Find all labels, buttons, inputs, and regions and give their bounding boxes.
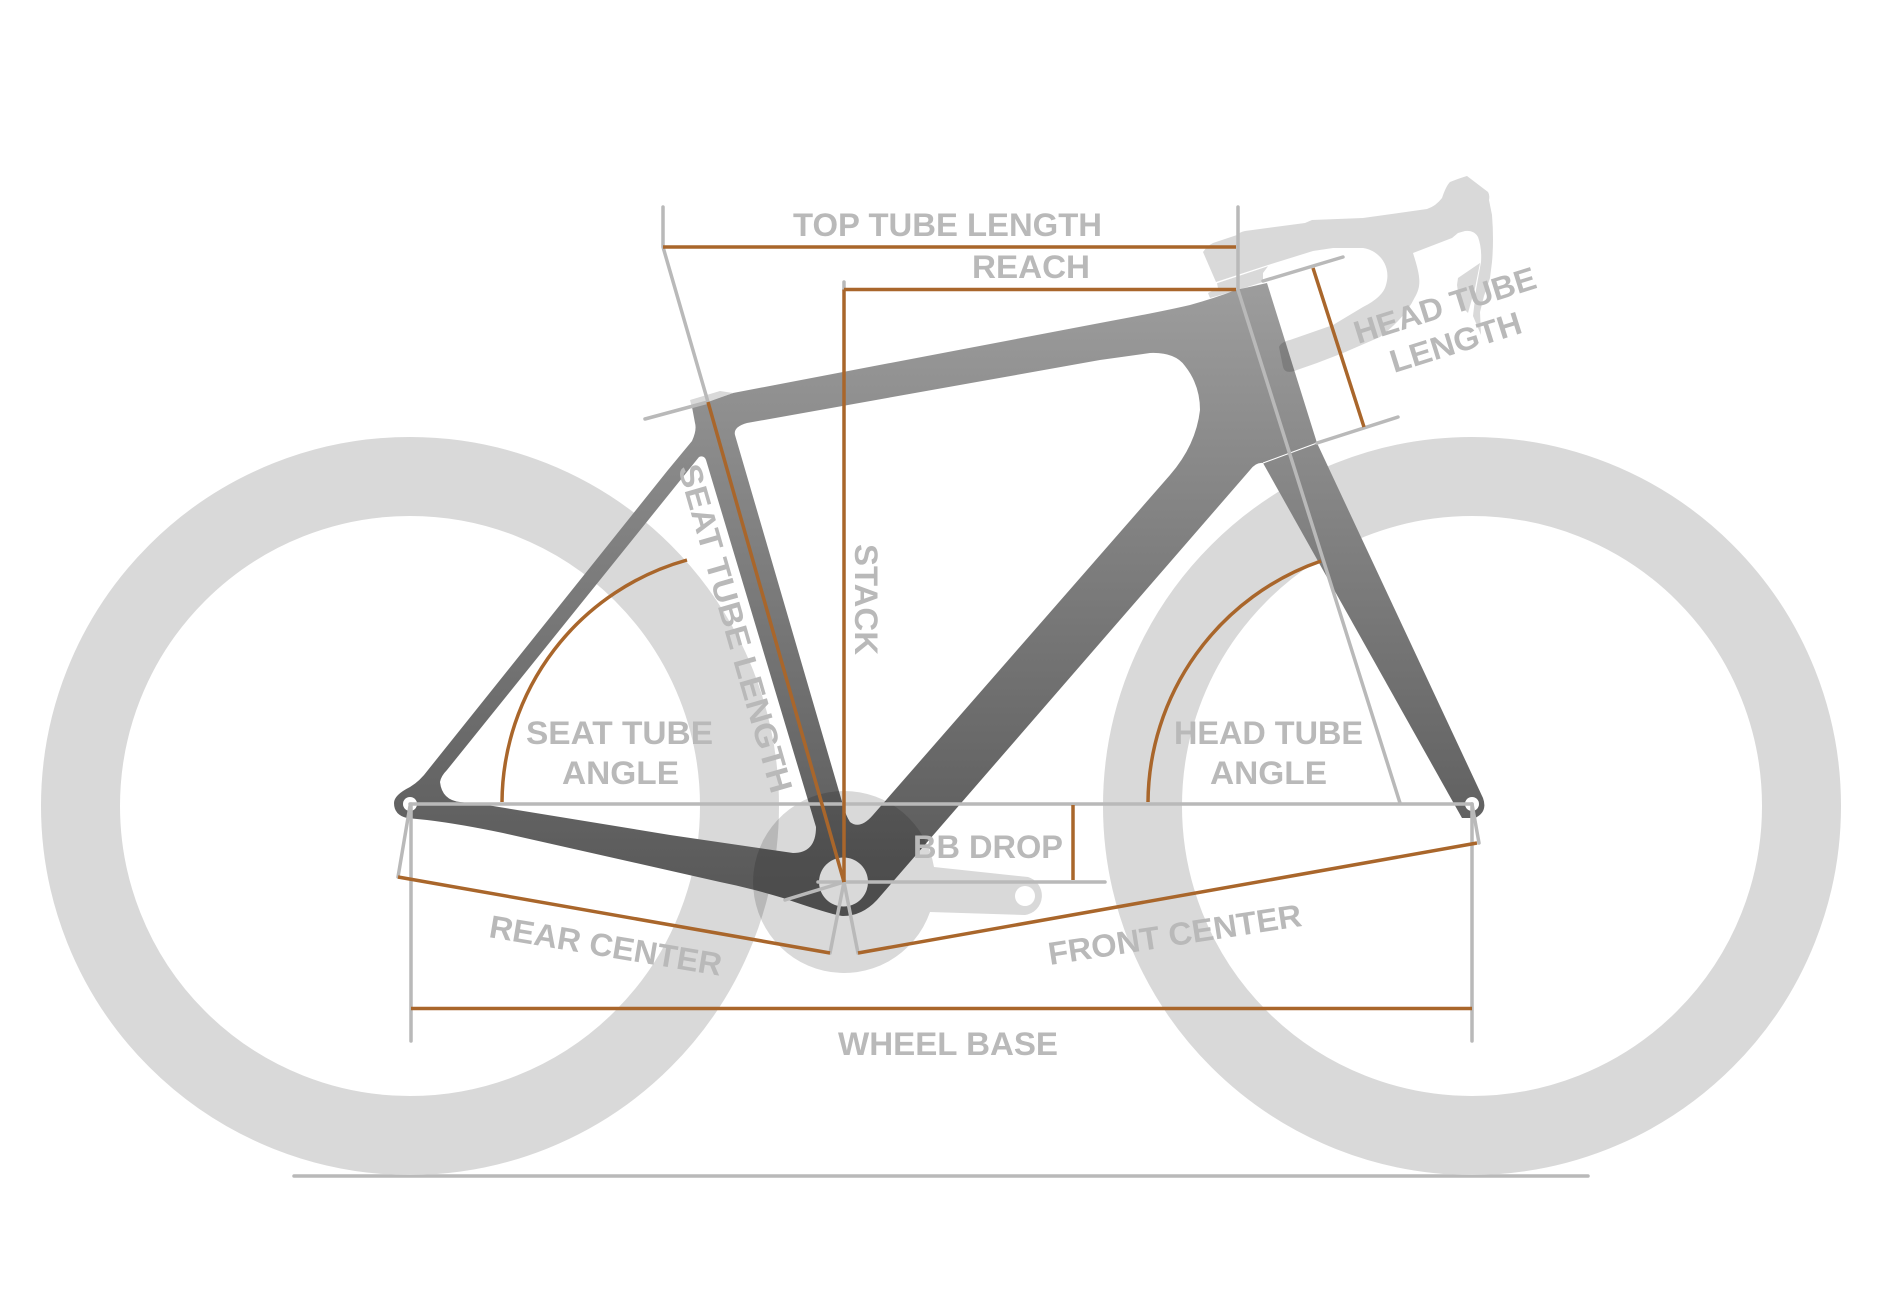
handlebar silhouette — [1203, 176, 1493, 372]
seat tube length label: SEAT TUBE LENGTH — [671, 460, 800, 797]
crown separator — [1263, 443, 1317, 463]
frame and fork — [394, 283, 1484, 916]
rear dropout hole — [403, 797, 417, 811]
head tube length label: LENGTH — [1385, 305, 1526, 380]
handlebar and stem — [1203, 176, 1493, 372]
fork — [1263, 443, 1484, 818]
head tube angle label: ANGLE — [1210, 755, 1327, 791]
seat collar — [690, 391, 733, 408]
orange measurement lines — [398, 247, 1477, 1008]
seat tube angle label: SEAT TUBE — [526, 715, 713, 751]
top tube left extension — [663, 207, 708, 402]
ground line — [294, 1174, 1588, 1178]
BB horizontal — [818, 880, 1105, 884]
front dropout hole — [1465, 797, 1479, 811]
crankset and chainring — [753, 791, 1042, 973]
front center — [858, 843, 1477, 953]
bottom bracket shell — [819, 858, 868, 906]
front wheel — [1142, 476, 1802, 1136]
wheel base label: WHEEL BASE — [838, 1026, 1058, 1062]
top tube length — [663, 245, 1236, 249]
rear center — [398, 877, 830, 953]
top tube length label: TOP TUBE LENGTH — [793, 207, 1102, 243]
seat top tick — [645, 402, 708, 419]
reach — [844, 288, 1236, 291]
head tube length label: HEAD TUBE — [1349, 260, 1540, 351]
seat tube — [708, 402, 844, 882]
rear center ticks — [398, 806, 844, 953]
head tube bottom tick — [1317, 417, 1398, 443]
rear center label: REAR CENTER — [487, 908, 725, 983]
wheels — [80, 476, 1802, 1136]
seat tube angle label: ANGLE — [562, 755, 679, 791]
grey construction lines — [398, 207, 1479, 1041]
BB drop — [1071, 805, 1075, 880]
head axis line — [1238, 207, 1400, 803]
BB drop label: BB DROP — [913, 829, 1063, 865]
seat tube angle arc — [502, 560, 687, 802]
head tube angle label: HEAD TUBE — [1174, 715, 1363, 751]
wheel base — [411, 1007, 1472, 1010]
rear wheel — [80, 476, 740, 1136]
reach label: REACH — [972, 249, 1090, 285]
front center label: FRONT CENTER — [1046, 897, 1304, 972]
front center ticks — [844, 804, 1479, 953]
head tube length — [1313, 268, 1364, 427]
labels — [487, 207, 1540, 1062]
spacer — [1208, 266, 1268, 298]
stack label: STACK — [848, 544, 884, 655]
stack tick — [842, 282, 846, 290]
head tube angle label — [1174, 715, 1363, 791]
head tube angle arc — [1148, 561, 1321, 802]
brake lever — [1457, 263, 1480, 313]
wheel base extension right — [1470, 804, 1474, 1041]
wheel base extension left — [409, 804, 413, 1041]
horizontal axle line — [410, 802, 1472, 806]
main frame — [394, 283, 1317, 916]
stack — [842, 290, 846, 882]
seat tube angle label — [526, 715, 713, 791]
head tube top tick — [1263, 257, 1343, 281]
